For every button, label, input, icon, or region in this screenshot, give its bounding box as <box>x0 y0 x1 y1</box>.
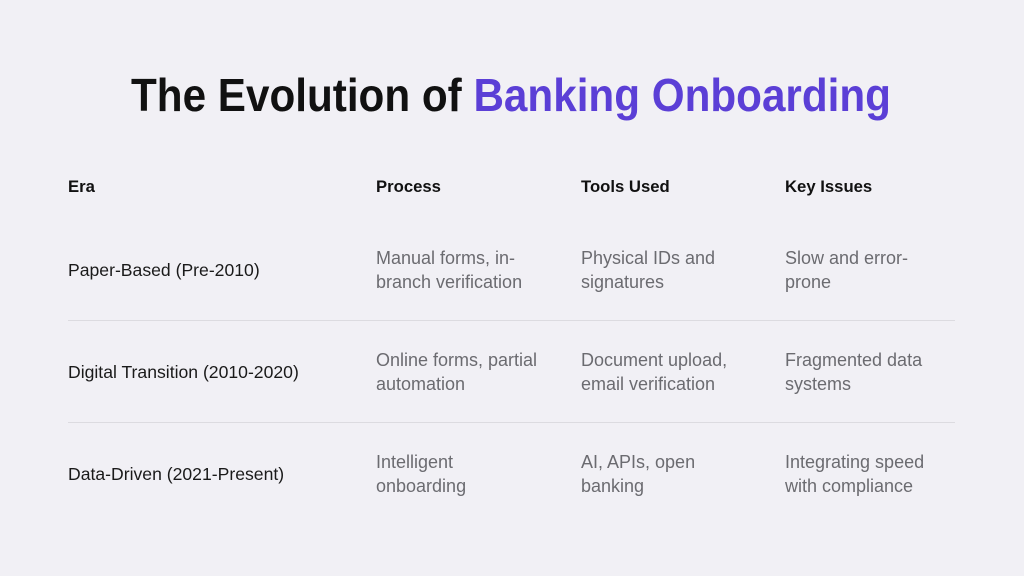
row: paper-based: prone <box>785 272 831 292</box>
header row <box>68 177 872 196</box>
row: data-driven: banking <box>581 476 644 496</box>
row: data-driven: onboarding <box>376 476 466 496</box>
row: data-driven: AI, APIs, open <box>581 452 695 472</box>
row: data-driven <box>68 452 924 496</box>
header row: Process <box>376 177 441 196</box>
header row: Key Issues <box>785 177 872 196</box>
row: digital transition: Digital Transition (2010-2020) <box>68 362 299 382</box>
row: paper-based: Manual forms, in- <box>376 248 515 268</box>
title: The Evolution of Banking Onboarding <box>131 69 891 121</box>
row: digital transition: automation <box>376 374 465 394</box>
row: data-driven: Intelligent <box>376 452 453 472</box>
row: digital transition <box>68 350 922 394</box>
row: data-driven: Integrating speed <box>785 452 924 472</box>
row: data-driven: Data-Driven (2021-Present) <box>68 464 284 484</box>
row: paper-based <box>68 248 908 292</box>
row: paper-based: Paper-Based (Pre-2010) <box>68 260 260 280</box>
row: digital transition: Fragmented data <box>785 350 922 370</box>
header row: Tools Used <box>581 177 670 196</box>
header row: Era <box>68 177 95 196</box>
row: digital transition: Document upload, <box>581 350 727 370</box>
table <box>68 177 955 496</box>
row: paper-based: signatures <box>581 272 664 292</box>
row: data-driven: with compliance <box>785 476 913 496</box>
row: digital transition: Online forms, partial <box>376 350 537 370</box>
row: paper-based: Physical IDs and <box>581 248 715 268</box>
row: paper-based: Slow and error- <box>785 248 908 268</box>
row: paper-based: branch verification <box>376 272 522 292</box>
row: digital transition: systems <box>785 374 851 394</box>
row: digital transition: email verification <box>581 374 715 394</box>
